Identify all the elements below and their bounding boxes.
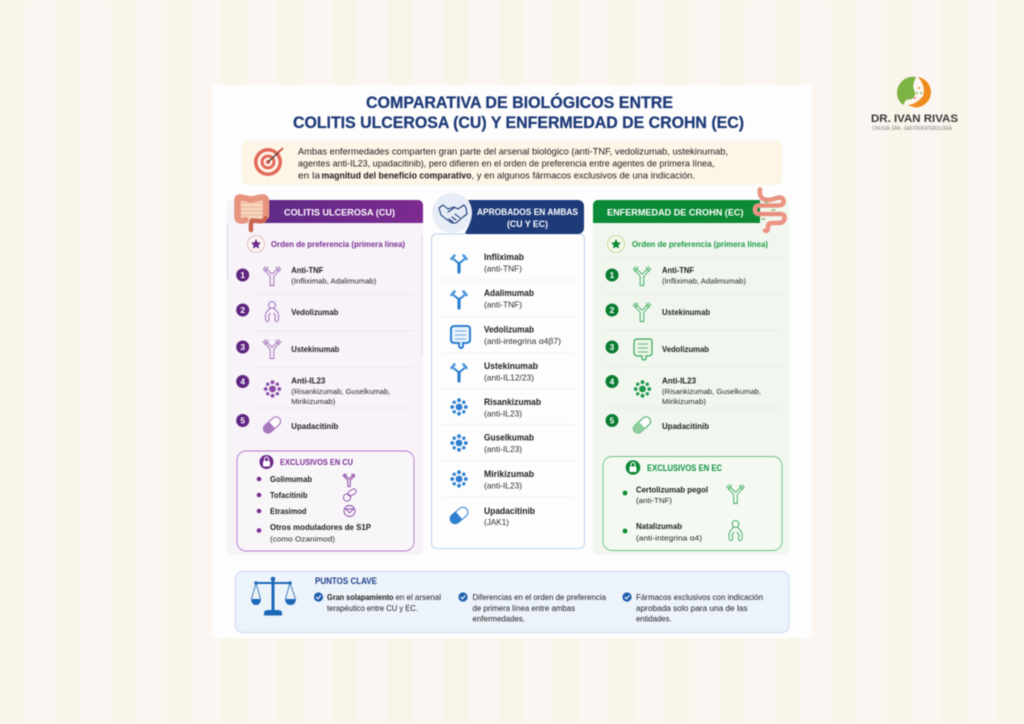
icon: target <box>254 148 283 176</box>
item: upadacitinib: Upadacitinib <box>484 506 536 516</box>
item: certolizumab pegol: (anti-TNF) <box>636 496 672 505</box>
key point 3: entidades. <box>636 614 672 624</box>
item: tofacitinib: Tofacitinib <box>270 490 308 500</box>
panel: enfermedad de crohn <box>593 190 789 555</box>
key point 3 <box>622 592 763 624</box>
icon: colon <box>238 197 266 230</box>
row 5: upadacitinib <box>236 414 338 435</box>
icon: handshake <box>432 193 472 233</box>
subheading: orden de preferencia: Orden de preferencia (primera línea) <box>632 239 768 249</box>
row 2: vedolizumab: Vedolizumab <box>291 307 338 317</box>
logo: Dr. Ivan Rivas: DR. IVAN RIVAS <box>871 113 958 125</box>
key point 2 <box>458 592 606 624</box>
row 1: anti-TNF <box>236 265 377 286</box>
item: golimumab: Golimumab <box>270 474 312 484</box>
item: mirikizumab: (anti-IL23) <box>484 480 522 490</box>
row 2: vedolizumab: 2 <box>240 305 245 315</box>
icon: small intestine <box>755 190 785 231</box>
intro text: agentes anti-IL23, upadacitinib), pero difieren en el orden de preferencia entre agentes de primera línea, <box>298 158 714 168</box>
item: upadacitinib <box>448 505 536 527</box>
row 2: ustekinumab: 2 <box>610 305 615 315</box>
heading: aprobados en ambas: (CU Y EC) <box>507 219 548 229</box>
row 1: anti-TNF: (Infliximab, Adalimumab) <box>662 276 746 286</box>
item: ustekinumab: Ustekinumab <box>484 361 539 371</box>
subheading: orden de preferencia <box>248 236 405 252</box>
row 5: upadacitinib: 5 <box>610 416 615 426</box>
title: COLITIS ULCEROSA (CU) Y ENFERMEDAD DE CROHN (EC) <box>293 114 744 132</box>
row 3: ustekinumab: 3 <box>240 342 245 352</box>
item: guselkumab: (anti-IL23) <box>484 444 522 454</box>
panel: aprobados en ambas <box>432 193 584 548</box>
heading: aprobados en ambas: APROBADOS EN AMBAS <box>477 207 578 217</box>
callout: exclusivos en CU <box>237 451 414 551</box>
item: infliximab <box>452 252 525 274</box>
key point 1 <box>314 592 441 613</box>
key point 1: terapéutico entre CU y EC. <box>327 603 418 613</box>
row 5: upadacitinib <box>606 414 709 435</box>
row 3: vedolizumab <box>606 339 709 360</box>
row 3: ustekinumab <box>236 340 339 358</box>
item: vedolizumab <box>451 324 561 348</box>
icon: lock <box>626 460 640 475</box>
item: vedolizumab: (anti-integrina α4β7) <box>484 336 561 346</box>
logo: Dr. Ivan Rivas: CIRUGÍA, ERA - GASTROENTEROLOGÍA <box>872 125 953 132</box>
item: guselkumab <box>450 432 535 454</box>
panel: colitis ulcerosa <box>227 197 423 555</box>
item: guselkumab: Guselkumab <box>484 432 535 442</box>
row 4: anti-IL23: Mirikizumab) <box>291 397 336 406</box>
row 3: vedolizumab: Vedolizumab <box>662 344 709 354</box>
intro text: Ambas enfermedades comparten gran parte del arsenal biológico (anti-TNF, vedolizumab, ustekinumab, <box>298 146 728 156</box>
poster panel <box>212 85 812 638</box>
key point 3: aprobada solo para una de las <box>636 603 748 613</box>
key point 2: Diferencias en el orden de preferencia <box>472 592 606 602</box>
item: ustekinumab: (anti-IL12/23) <box>484 372 534 382</box>
key point 3: Fármacos exclusivos con indicación <box>636 592 763 602</box>
row 3: ustekinumab: Ustekinumab <box>291 344 339 354</box>
row 4: anti-IL23: (Risankizumab, Guselkumab, <box>291 387 390 396</box>
row 1: anti-TNF: 1 <box>240 270 245 280</box>
item: ustekinumab <box>452 361 539 382</box>
item: vedolizumab: Vedolizumab <box>484 324 535 334</box>
row 4: anti-IL23 <box>606 375 761 406</box>
item: adalimumab: Adalimumab <box>484 288 535 298</box>
intro text: magnitud del beneficio comparativo <box>322 170 472 180</box>
item: otros moduladores <box>257 522 371 544</box>
row 4: anti-IL23: Anti-IL23 <box>291 376 326 386</box>
panel: puntos clave: PUNTOS CLAVE <box>315 576 377 586</box>
row 4: anti-IL23: 4 <box>610 376 615 386</box>
row 1: anti-TNF <box>606 265 746 286</box>
row 4: anti-IL23: Mirikizumab) <box>662 397 706 406</box>
callout: exclusivos en CU: EXCLUSIVOS EN CU <box>280 457 353 467</box>
callout: exclusivos en EC: EXCLUSIVOS EN EC <box>647 463 723 473</box>
row 1: anti-TNF: 1 <box>610 270 615 280</box>
icon: scales <box>251 577 296 616</box>
row 1: anti-TNF: Anti-TNF <box>662 265 694 275</box>
row 1: anti-TNF: Anti-TNF <box>291 265 323 275</box>
item: infliximab: (anti-TNF) <box>484 264 522 274</box>
subheading: orden de preferencia: Orden de preferencia (primera línea) <box>271 239 405 249</box>
intro text: , y en algunos fármacos exclusivos de una indicación. <box>472 170 695 180</box>
row 2: ustekinumab: Ustekinumab <box>662 307 710 317</box>
key point 2: enfermedades. <box>472 614 525 624</box>
heading: colitis ulcerosa <box>255 200 423 223</box>
heading: enfermedad de crohn <box>593 200 760 223</box>
item: adalimumab: (anti-TNF) <box>484 300 522 310</box>
key point 1: Gran solapamiento <box>327 592 394 602</box>
row 2: vedolizumab <box>236 302 338 322</box>
item: infliximab: Infliximab <box>484 252 525 262</box>
intro callout <box>242 141 782 185</box>
item: otros moduladores: Otros moduladores de S1P <box>270 522 371 532</box>
item: golimumab <box>257 474 355 487</box>
row 4: anti-IL23: (Risankizumab, Guselkumab, <box>662 387 761 396</box>
row 4: anti-IL23: Anti-IL23 <box>662 376 696 386</box>
item: etrasimod <box>257 506 355 516</box>
item: certolizumab pegol: Certolizumab pegol <box>636 484 708 494</box>
title: COMPARATIVA DE BIOLÓGICOS ENTRE <box>366 93 673 112</box>
icon: lock <box>260 455 274 469</box>
row 5: upadacitinib: 5 <box>240 416 245 426</box>
callout: exclusivos en EC <box>603 456 782 550</box>
item: etrasimod: Etrasimod <box>270 506 306 516</box>
row 1: anti-TNF: (Infliximab, Adalimumab) <box>291 276 377 286</box>
item: natalizumab: (anti-integrina α4) <box>636 534 703 542</box>
item: risankizumab <box>450 397 542 418</box>
row 5: upadacitinib: Upadacitinib <box>662 421 709 431</box>
heading: enfermedad de crohn: ENFERMEDAD DE CROHN (EC) <box>607 208 744 218</box>
item: risankizumab: Risankizumab <box>484 397 542 407</box>
item: otros moduladores: (como Ozanimod) <box>270 534 335 544</box>
item: natalizumab: Natalizumab <box>636 521 682 531</box>
panel: puntos clave <box>236 572 789 632</box>
item: risankizumab: (anti-IL23) <box>484 408 522 418</box>
row 4: anti-IL23 <box>236 375 390 406</box>
row 4: anti-IL23: 4 <box>240 376 245 386</box>
item: tofacitinib <box>257 488 357 501</box>
heading: aprobados en ambas <box>465 200 584 234</box>
row 3: vedolizumab: 3 <box>610 342 615 352</box>
intro text: en la <box>298 170 321 180</box>
logo: Dr. Ivan Rivas <box>871 77 958 132</box>
row 2: ustekinumab <box>606 303 710 322</box>
title <box>293 93 744 132</box>
intro text <box>298 146 728 180</box>
item: upadacitinib: (JAK1) <box>484 517 509 527</box>
item: natalizumab <box>623 521 742 542</box>
item: adalimumab <box>452 288 535 310</box>
item: mirikizumab: Mirikizumab <box>484 469 535 479</box>
subheading: orden de preferencia <box>608 236 768 252</box>
key point 1: en el arsenal <box>396 592 441 602</box>
heading: colitis ulcerosa: COLITIS ULCEROSA (CU) <box>284 208 395 218</box>
row 5: upadacitinib: Upadacitinib <box>291 421 338 431</box>
key point 2: de primera línea entre ambas <box>472 603 575 613</box>
item: certolizumab pegol <box>623 484 744 505</box>
item: mirikizumab <box>450 469 535 490</box>
